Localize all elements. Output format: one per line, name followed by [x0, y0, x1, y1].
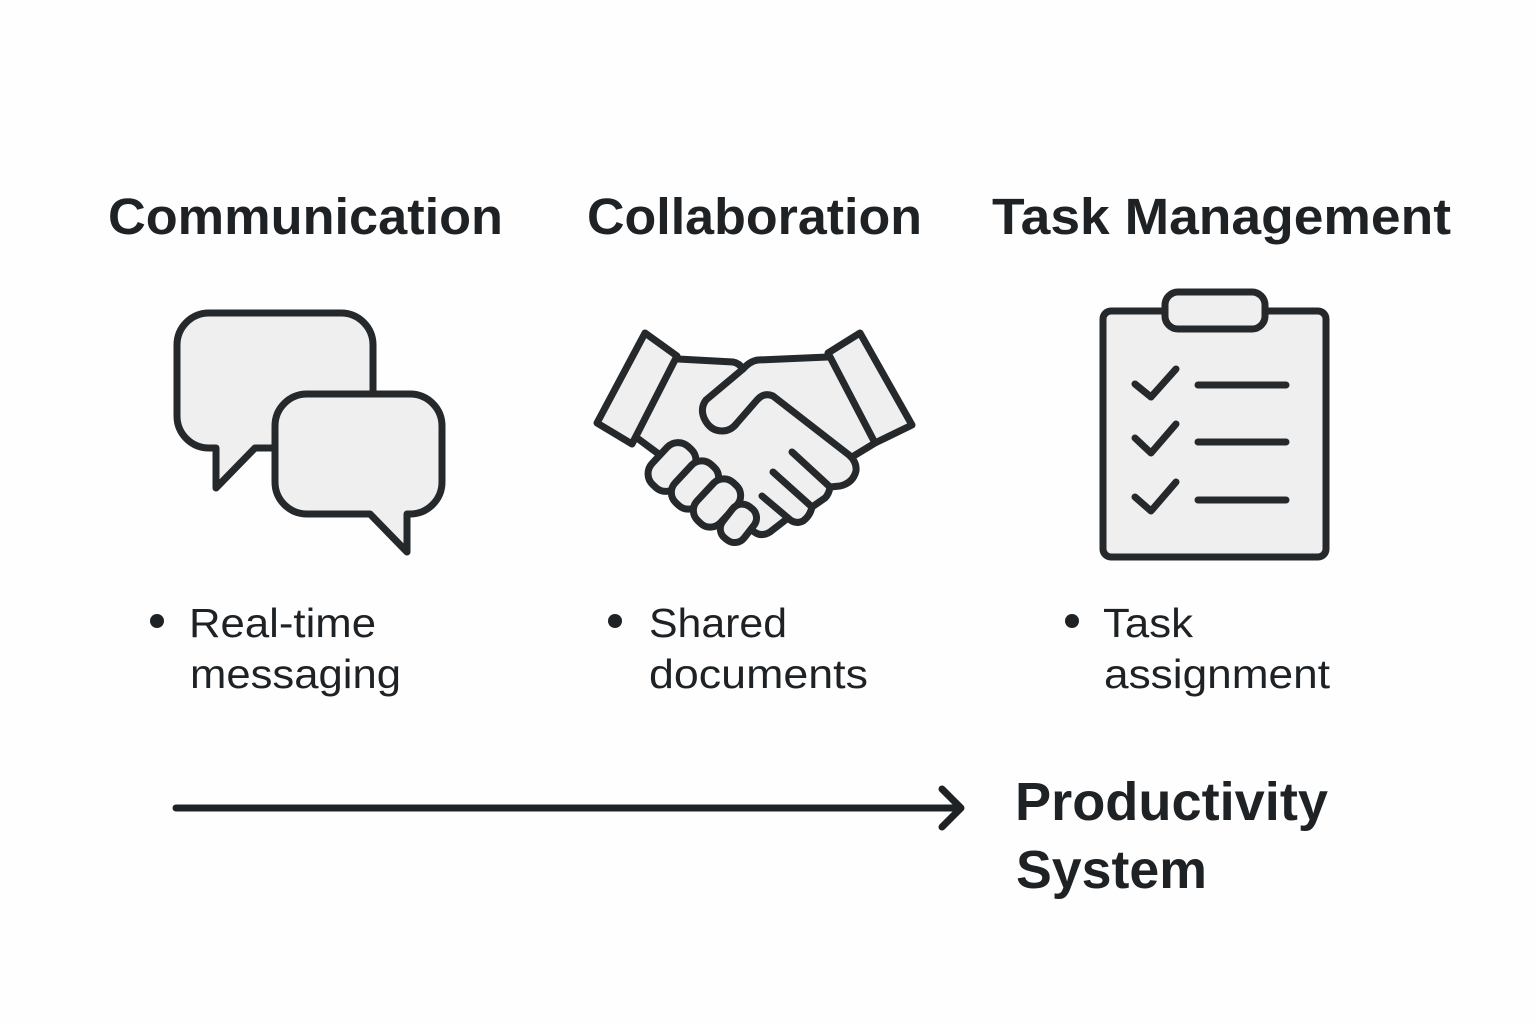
bullet: shared documents [608, 600, 868, 697]
bullet: real-time messaging [150, 600, 401, 697]
outcome label: productivity system: Productivity [1015, 772, 1328, 832]
bullet: real-time messaging: messaging [190, 651, 401, 697]
arrow [176, 789, 961, 827]
icon: speech bubbles [177, 313, 442, 552]
outcome label: productivity system [1015, 772, 1328, 900]
panel: communication [108, 188, 503, 697]
bullet: shared documents: documents [649, 651, 868, 697]
bullet: task assignment: Task [1103, 600, 1194, 646]
panel: collaboration [587, 188, 922, 697]
heading: task management: Task Management [992, 188, 1451, 245]
bullet: task assignment: assignment [1104, 651, 1331, 697]
bullet: task assignment [1065, 600, 1331, 697]
heading: communication: Communication [108, 188, 503, 245]
bullet: shared documents: Shared [649, 600, 787, 646]
outcome label: productivity system: System [1016, 840, 1207, 900]
heading: collaboration: Collaboration [587, 188, 922, 245]
icon: handshake [597, 333, 912, 547]
panel: task management [992, 188, 1451, 697]
bullet: real-time messaging: Real-time [189, 600, 376, 646]
icon: clipboard checklist [1103, 292, 1326, 557]
